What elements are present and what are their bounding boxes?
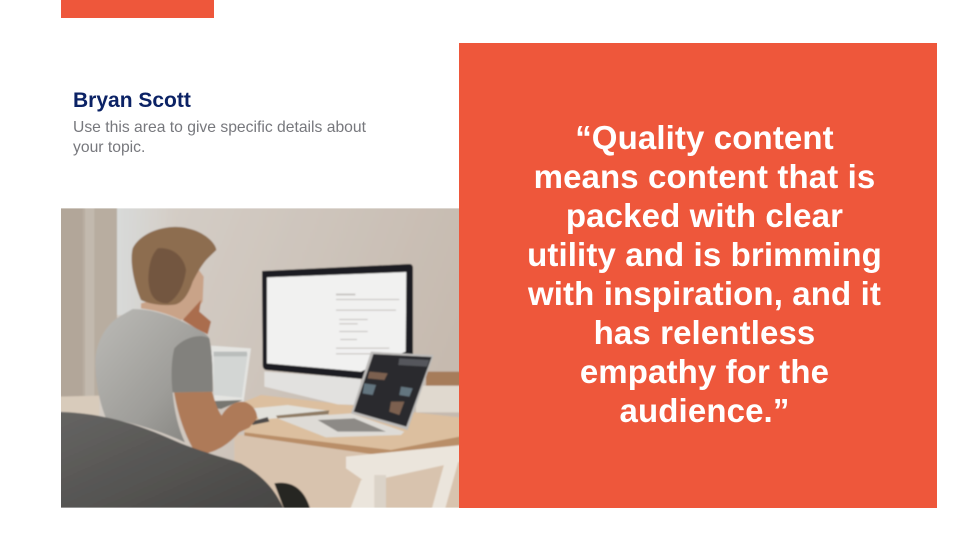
man's hair <box>132 227 216 305</box>
monitor stand <box>264 372 361 405</box>
shelf items <box>416 370 459 413</box>
quote text: has relentless <box>594 314 815 351</box>
man's hand <box>183 300 211 334</box>
shirt sleeve shade <box>172 336 213 392</box>
monitor <box>262 264 413 379</box>
chair <box>58 412 285 512</box>
quote text: packed with clear <box>566 197 843 234</box>
text block: description: your topic. <box>73 139 145 156</box>
panel: quote <box>459 43 937 508</box>
man's arm <box>174 388 257 454</box>
dark trousers <box>274 483 311 512</box>
quote text: means content that is <box>534 158 875 195</box>
window light <box>117 208 148 315</box>
lower wall <box>234 435 459 508</box>
man's shirt <box>95 309 213 442</box>
desk <box>58 395 468 457</box>
text block: description <box>73 119 366 156</box>
heading: name: Bryan Scott <box>73 89 191 112</box>
desk legs <box>346 444 459 508</box>
quote text: “Quality content <box>575 119 834 156</box>
text block: description: Use this area to give specific details about <box>73 119 366 136</box>
top accent bar <box>61 0 214 18</box>
main laptop <box>278 352 434 437</box>
quote text: empathy for the <box>580 353 829 390</box>
quote text: with inspiration, and it <box>528 275 881 312</box>
papers and pen <box>251 405 329 425</box>
photo: man working at a desk <box>61 208 459 508</box>
small laptop <box>211 346 251 409</box>
curtain <box>58 205 117 397</box>
man's neck and face <box>141 268 204 320</box>
quote text <box>527 119 882 429</box>
wall <box>98 208 459 462</box>
quote text: audience.” <box>620 392 789 429</box>
quote text: utility and is brimming <box>527 236 882 273</box>
